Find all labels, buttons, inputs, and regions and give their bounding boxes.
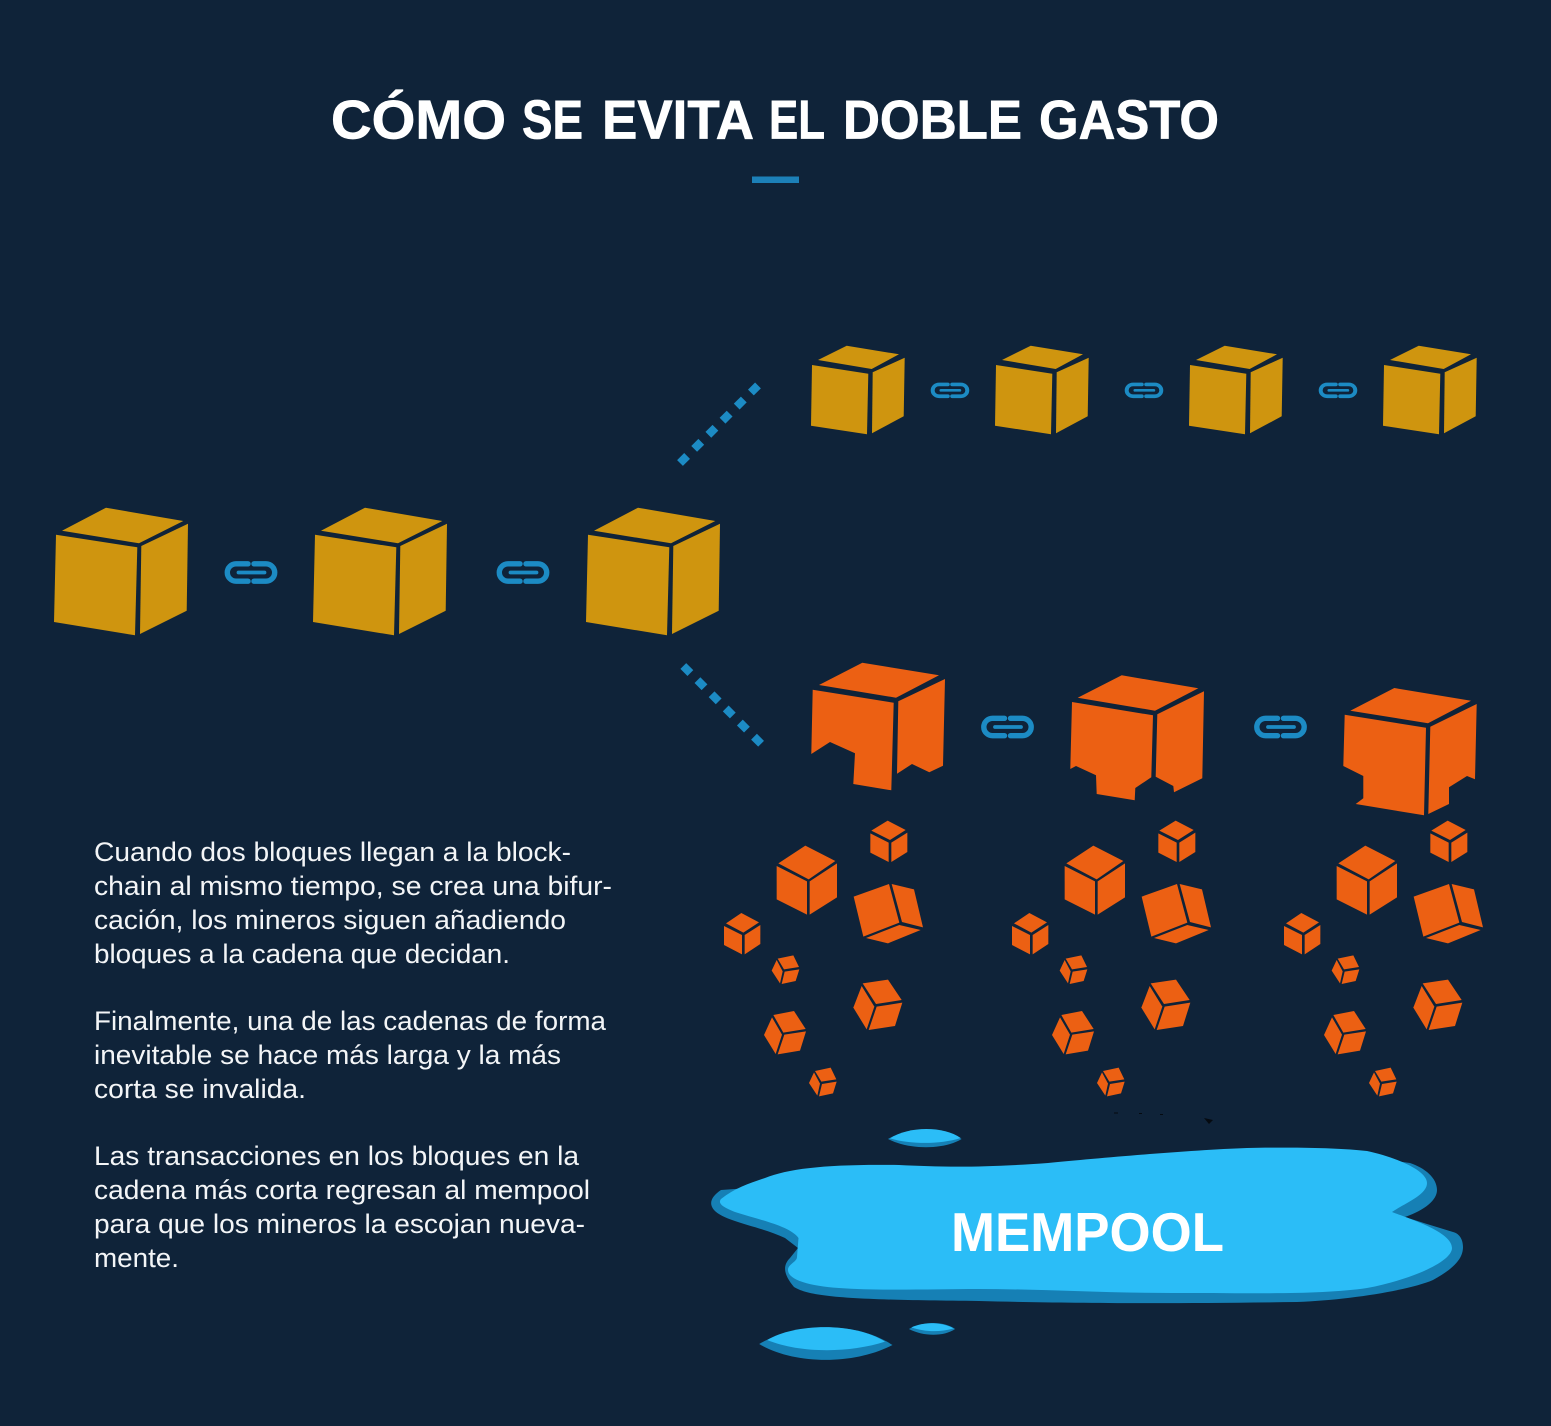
stray specks above the pool (1114, 1112, 1213, 1124)
falling cube fragments, column 1 (724, 821, 923, 1096)
explanatory text: Finalmente, una de las cadenas de forma (94, 1006, 607, 1036)
gold block 2 (313, 508, 447, 635)
upper chain of gold blocks (811, 346, 1477, 434)
title: DOBLE (843, 88, 1022, 150)
title underline (752, 176, 799, 183)
explanatory text: chain al mismo tiempo, se crea una bifur- (94, 871, 612, 901)
orange link 2 (1257, 718, 1304, 736)
title (331, 88, 1219, 150)
explanatory text: para que los mineros la escojan nueva- (94, 1209, 585, 1239)
explanatory text: bloques a la cadena que decidan. (94, 939, 510, 969)
upper block 4 (1383, 346, 1477, 434)
upper block 3 (1189, 346, 1283, 434)
upper link 1 (933, 384, 967, 396)
orange link 1 (984, 718, 1031, 736)
falling cube fragments, column 2 (1012, 821, 1211, 1096)
explanatory text (94, 837, 612, 1273)
explanatory text: cadena más corta regresan al mempool (94, 1175, 590, 1205)
crumbling block 1 (811, 663, 945, 790)
title: GASTO (1039, 88, 1219, 150)
upper block 1 (811, 346, 905, 434)
explanatory text: Las transacciones en los bloques en la (94, 1141, 580, 1171)
dotted branch up (680, 385, 758, 463)
explanatory text: mente. (94, 1243, 179, 1273)
title: EL (769, 88, 825, 150)
main chain of gold blocks (54, 508, 720, 635)
link icon 2 (499, 564, 547, 581)
explanatory text: cación, los mineros siguen añadiendo (94, 905, 566, 935)
mempool puddle (711, 1129, 1463, 1360)
explanatory text: Cuando dos bloques llegan a la block- (94, 837, 571, 867)
gold block 1 (54, 508, 188, 635)
crumbling block 2 (1070, 675, 1204, 800)
title: EVITA (602, 88, 754, 150)
link icon 1 (227, 564, 275, 581)
lower chain of crumbling orange blocks (811, 663, 1477, 815)
gold block 3 (586, 508, 720, 635)
puddle surface (720, 1148, 1452, 1293)
title: SE (522, 88, 583, 150)
droplets (759, 1129, 962, 1360)
crumbling block 3 (1343, 688, 1477, 815)
upper block 2 (995, 346, 1089, 434)
falling cube fragments, column 3 (1284, 821, 1483, 1096)
upper link 2 (1127, 384, 1161, 396)
upper link 3 (1321, 384, 1355, 396)
dotted branch down (683, 666, 762, 744)
puddle shadow (711, 1148, 1463, 1303)
title: CÓMO (331, 88, 506, 150)
explanatory text: corta se invalida. (94, 1074, 306, 1104)
explanatory text: inevitable se hace más larga y la más (94, 1040, 561, 1070)
mempool label: MEMPOOL (951, 1201, 1224, 1263)
